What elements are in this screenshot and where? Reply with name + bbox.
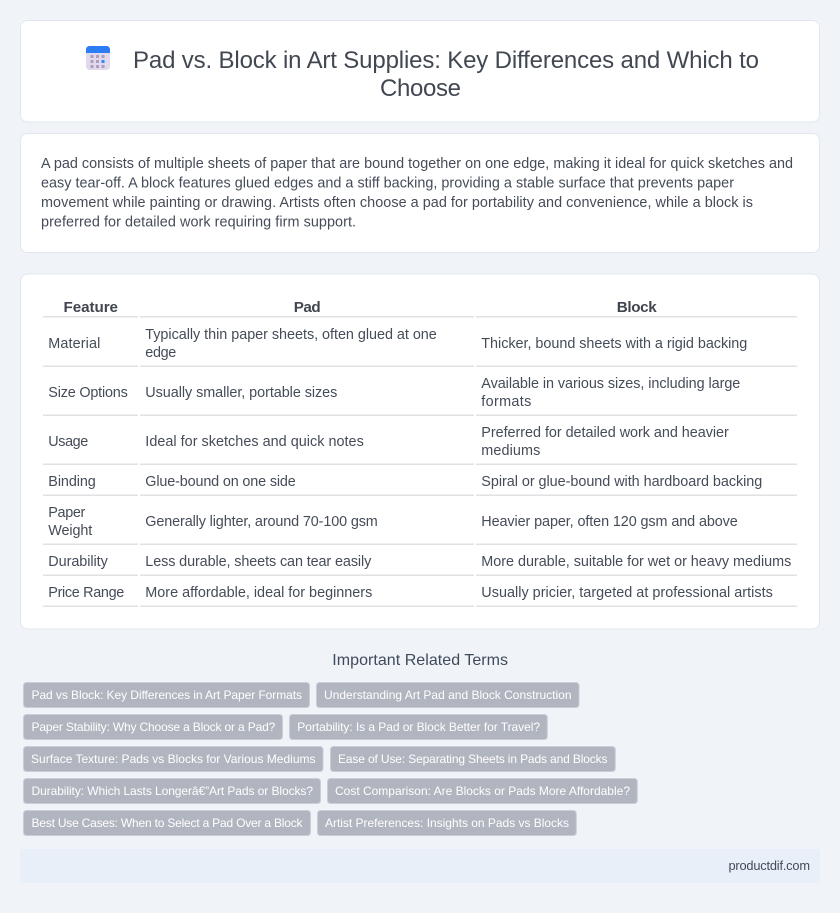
- row: size options: formats: [481, 394, 531, 410]
- table header row: Feature: [64, 299, 118, 316]
- row: paper weight: Paper: [48, 505, 86, 521]
- row: paper weight: Weight: [48, 523, 92, 539]
- row: binding: Glue-bound on one side: [145, 474, 296, 490]
- footer source text: productdif.com: [728, 858, 810, 873]
- row: paper weight: Generally lighter, around 70-100 gsm: [145, 514, 378, 530]
- panel: title header: [20, 20, 820, 122]
- row: usage: [48, 425, 729, 459]
- tag: Paper Stability: Why Choose a Block or a Pad?: [32, 720, 276, 734]
- panel: intro paragraph: [20, 134, 820, 252]
- row: size options: Usually smaller, portable sizes: [145, 385, 337, 401]
- footer bar: [20, 849, 820, 883]
- row: material: Thicker, bound sheets with a rigid backing: [481, 336, 747, 352]
- tag: Best Use Cases: When to Select a Pad Over a Block: [32, 816, 304, 830]
- table header row: [64, 299, 657, 316]
- tag: [24, 682, 310, 708]
- tag: [24, 810, 310, 836]
- tag: [316, 682, 579, 708]
- row: size options: [48, 376, 740, 410]
- row: durability: More durable, suitable for wet or heavy mediums: [481, 554, 791, 570]
- panel: comparison table: [20, 274, 820, 629]
- intro text: preferred for detailed work requiring firm support.: [41, 214, 356, 230]
- row: size options: Available in various sizes, including large: [481, 376, 740, 392]
- row: material: edge: [145, 345, 176, 361]
- tag: [24, 714, 282, 740]
- row: binding: Binding: [48, 474, 96, 490]
- tag: [328, 778, 637, 804]
- row: binding: Spiral or glue-bound with hardboard backing: [481, 474, 762, 490]
- intro text: easy tear-off. A block features glued edges and a stiff backing, providing a stable surface that prevents paper: [41, 176, 734, 192]
- row: usage: mediums: [481, 443, 540, 459]
- tag: Surface Texture: Pads vs Blocks for Various Mediums: [31, 752, 316, 766]
- title text: [133, 47, 759, 102]
- intro text: movement while painting or drawing. Artists often choose a pad for portability and convenience, while a block is: [41, 195, 753, 211]
- tag: [24, 778, 320, 804]
- row: material: Typically thin paper sheets, often glued at one: [145, 327, 437, 343]
- row: size options: Size Options: [48, 385, 128, 401]
- row: durability: Less durable, sheets can tear easily: [145, 554, 372, 570]
- tag: Durability: Which Lasts Longerâ€”Art Pads or Blocks?: [32, 784, 313, 798]
- intro text: A pad consists of multiple sheets of paper that are bound together on one edge, making it ideal for quick sketches and: [41, 156, 793, 172]
- row: price range: [48, 585, 773, 601]
- row: usage: Usage: [48, 434, 88, 450]
- row: material: Material: [48, 336, 100, 352]
- row: durability: [48, 554, 791, 570]
- row: material: [48, 327, 747, 361]
- row: price range: Usually pricier, targeted at professional artists: [481, 585, 773, 601]
- tag: Artist Preferences: Insights on Pads vs Blocks: [325, 816, 569, 830]
- tag: Understanding Art Pad and Block Construction: [324, 688, 572, 702]
- row: paper weight: [48, 505, 738, 539]
- tag group: related terms: [24, 682, 637, 836]
- row: binding: [48, 474, 762, 490]
- table rules: [43, 316, 797, 607]
- tag: Portability: Is a Pad or Block Better for Travel?: [297, 720, 540, 734]
- row: price range: Price Range: [48, 585, 124, 601]
- row: usage: Ideal for sketches and quick notes: [145, 434, 364, 450]
- title text: Pad vs. Block in Art Supplies: Key Differences and Which to: [133, 47, 759, 74]
- intro text: [41, 156, 793, 230]
- tag: Ease of Use: Separating Sheets in Pads and Blocks: [338, 752, 608, 766]
- heading: important related terms: Important Related Terms: [332, 652, 508, 669]
- title text: Choose: [380, 75, 461, 102]
- row: durability: Durability: [48, 554, 109, 570]
- tag: Pad vs Block: Key Differences in Art Paper Formats: [32, 688, 302, 702]
- table header row: Pad: [294, 299, 321, 316]
- row: price range: More affordable, ideal for beginners: [145, 585, 372, 601]
- table header row: Block: [617, 299, 657, 316]
- tag: [290, 714, 547, 740]
- icon: calendar: [86, 46, 110, 70]
- tag: [318, 810, 576, 836]
- row: usage: Preferred for detailed work and heavier: [481, 425, 729, 441]
- tag: [24, 746, 323, 772]
- tag: Cost Comparison: Are Blocks or Pads More Affordable?: [335, 784, 630, 798]
- row: paper weight: Heavier paper, often 120 gsm and above: [481, 514, 738, 530]
- tag: [330, 746, 615, 772]
